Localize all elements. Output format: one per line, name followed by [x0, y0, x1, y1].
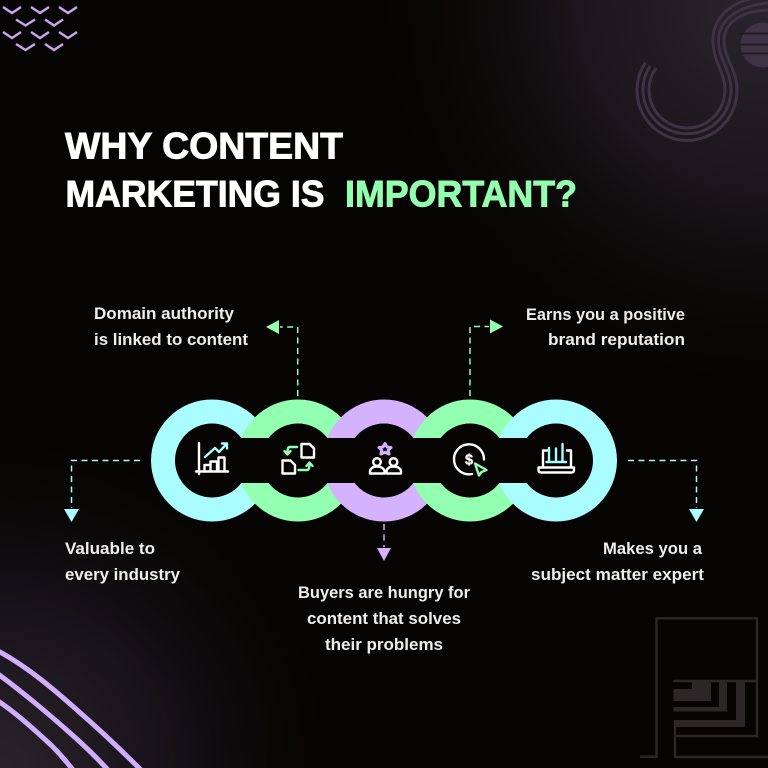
label: domain authority: [94, 305, 249, 349]
label: subject matter expert: Makes you a: [603, 540, 703, 558]
decoration: S-curve with striped circle: [637, 0, 768, 140]
connector: brand reputation arrow: [470, 320, 503, 396]
label: domain authority: is linked to content: [94, 331, 249, 349]
label: subject matter expert: subject matter expert: [531, 566, 705, 584]
decoration: bottom-right maze mark: [640, 618, 768, 757]
chain of rings: [151, 400, 617, 522]
icon: people with star: [370, 444, 401, 474]
label: buyers: content that solves: [307, 610, 461, 628]
label: brand reputation: [526, 306, 685, 349]
title: WHY CONTENT: [65, 124, 343, 166]
connector: subject matter expert arrow: [628, 460, 704, 522]
title: [65, 124, 577, 214]
title: IMPORTANT?: [345, 172, 577, 214]
label: buyers: Buyers are hungry for: [298, 584, 471, 602]
icon: laptop with bars: [538, 444, 574, 472]
label: valuable to every industry: every industry: [65, 566, 181, 584]
label: domain authority: Domain authority: [94, 305, 235, 323]
label: valuable to every industry: Valuable to: [65, 540, 155, 558]
label: brand reputation: brand reputation: [548, 331, 685, 349]
icon: dollar and cursor: [454, 444, 486, 476]
connector: valuable to every industry arrow: [64, 460, 140, 522]
decoration: bottom-left curved lines: [0, 651, 141, 768]
title: MARKETING IS: [66, 172, 324, 214]
icon: dollar and cursor: $: [465, 452, 473, 468]
connector: domain authority arrow: [266, 320, 298, 396]
label: valuable to every industry: [65, 540, 181, 584]
icon: growth chart: [196, 443, 228, 474]
connector: buyers arrow: [377, 524, 391, 561]
label: buyers: their problems: [325, 636, 443, 654]
label: brand reputation: Earns you a positive: [526, 306, 685, 324]
icon: document exchange: [282, 444, 314, 474]
decoration: chevron pattern: [3, 7, 77, 50]
label: subject matter expert: [531, 540, 705, 584]
label: buyers: [298, 584, 471, 654]
